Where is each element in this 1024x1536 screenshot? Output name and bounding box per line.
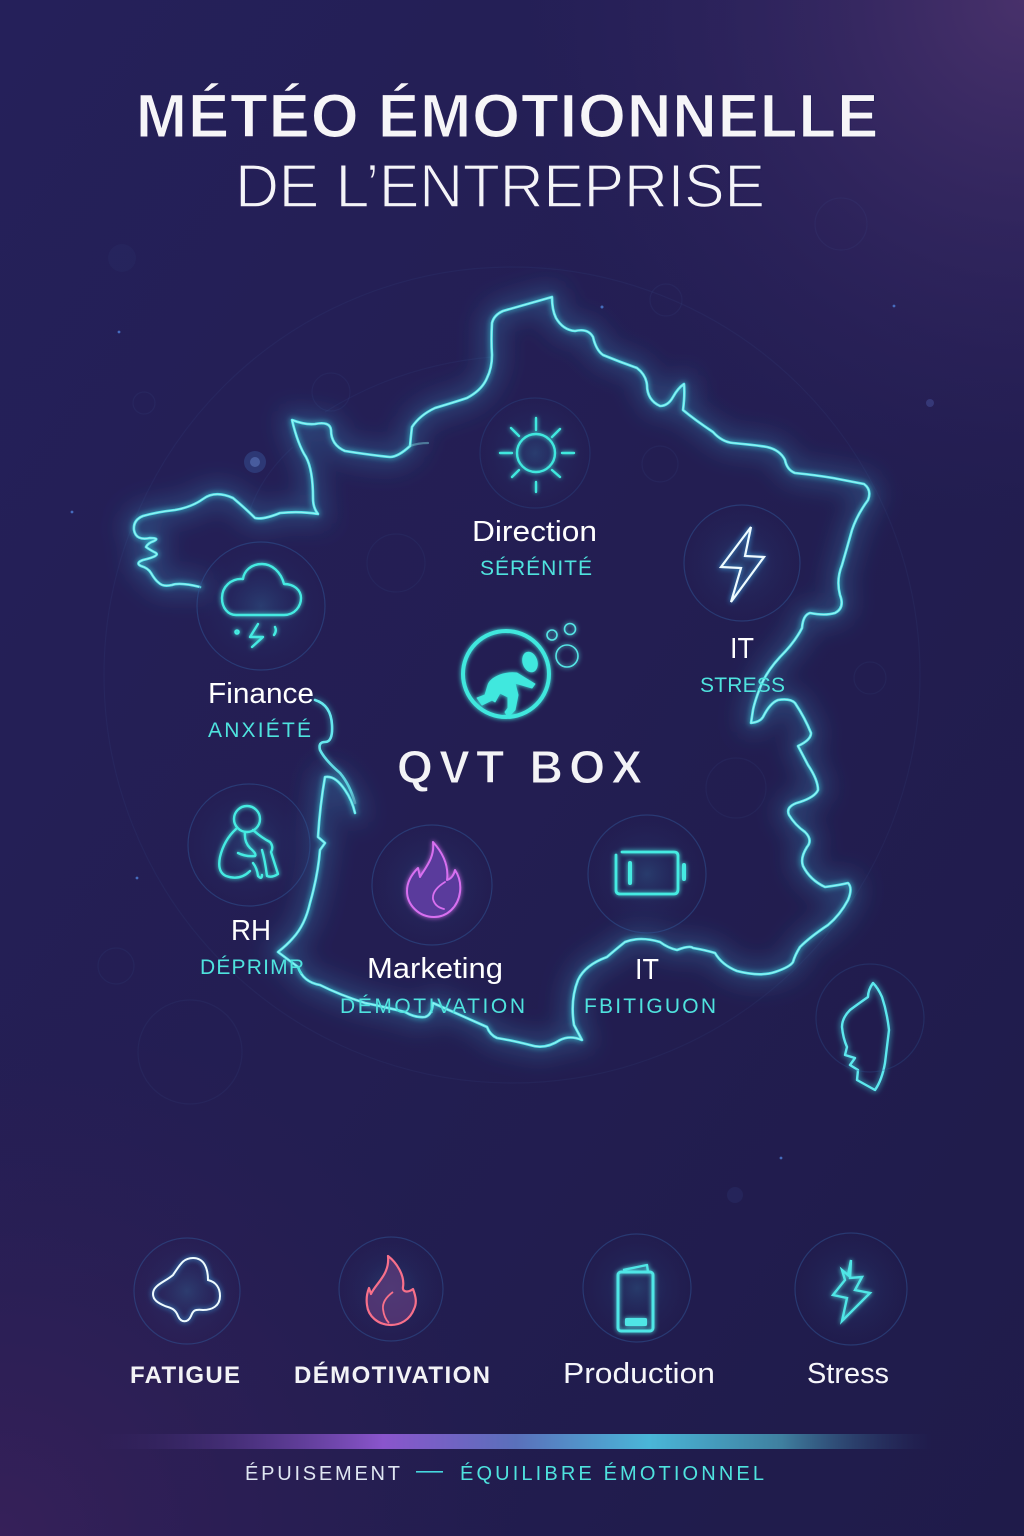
title line 2: DE L’ENTREPRISE: [235, 152, 765, 220]
scale caption: [245, 1462, 764, 1485]
scale caption: ÉPUISEMENT: [245, 1462, 400, 1485]
legend: Démotivation: DÉMOTIVATION: [294, 1361, 490, 1389]
icon: purple flame: [372, 825, 492, 945]
legend: Stress: [795, 1233, 907, 1390]
sublabel: Anxiété: ANXIÉTÉ: [208, 719, 311, 742]
legend: Production: [563, 1234, 715, 1390]
sublabel: Sérénité: SÉRÉNITÉ: [480, 557, 592, 580]
map of France: [134, 297, 889, 1090]
title line 1: MÉTÉO ÉMOTIONNELLE: [136, 82, 878, 150]
label: RH: RH: [231, 915, 271, 947]
sublabel: Déprimr: DÉPRIMR: [200, 956, 304, 979]
Corsica: [842, 983, 889, 1090]
gradient scale bar: [100, 1434, 932, 1449]
legend: Production: Production: [563, 1358, 715, 1390]
label: IT: IT: [730, 633, 754, 665]
region: IT stress: [684, 505, 800, 697]
legend row: [130, 1233, 907, 1390]
region: Marketing: [340, 825, 525, 1018]
icon: storm cloud: [197, 542, 325, 670]
icon: seated figure: [188, 784, 310, 906]
label: Marketing: Marketing: [367, 953, 503, 985]
Atlantic coast branch: [315, 700, 355, 803]
sublabel: Fbitiguon: FBITIGUON: [584, 995, 716, 1018]
Corsica halo ring: [816, 964, 924, 1072]
legend: Démotivation: [294, 1237, 490, 1389]
region: Direction: [472, 398, 597, 580]
brand name: QVT BOX: [397, 741, 642, 793]
sublabel: Démotivation: DÉMOTIVATION: [340, 995, 525, 1018]
logo: figure in bubble: [463, 624, 578, 717]
icon: lightning: [684, 505, 800, 621]
legend: Stress: Stress: [807, 1358, 889, 1390]
legend: Fatigue: [130, 1238, 240, 1389]
legend: Fatigue: FATIGUE: [130, 1362, 240, 1389]
icon: low battery: [588, 815, 706, 933]
main coastline: [134, 297, 869, 1047]
region: Finance: [197, 542, 325, 742]
brand: QVT BOX: [397, 624, 642, 793]
region: RH: [188, 784, 310, 979]
sublabel: Stress: STRESS: [700, 674, 785, 697]
label: Direction: Direction: [472, 516, 597, 548]
scale caption: ÉQUILIBRE ÉMOTIONNEL: [460, 1462, 764, 1485]
label: IT: IT: [635, 954, 659, 986]
region: IT fatigue: [584, 815, 716, 1018]
Normandy stub: [410, 443, 428, 446]
title: [136, 82, 878, 220]
icon: sun: [480, 398, 590, 508]
label: Finance: Finance: [208, 678, 314, 710]
